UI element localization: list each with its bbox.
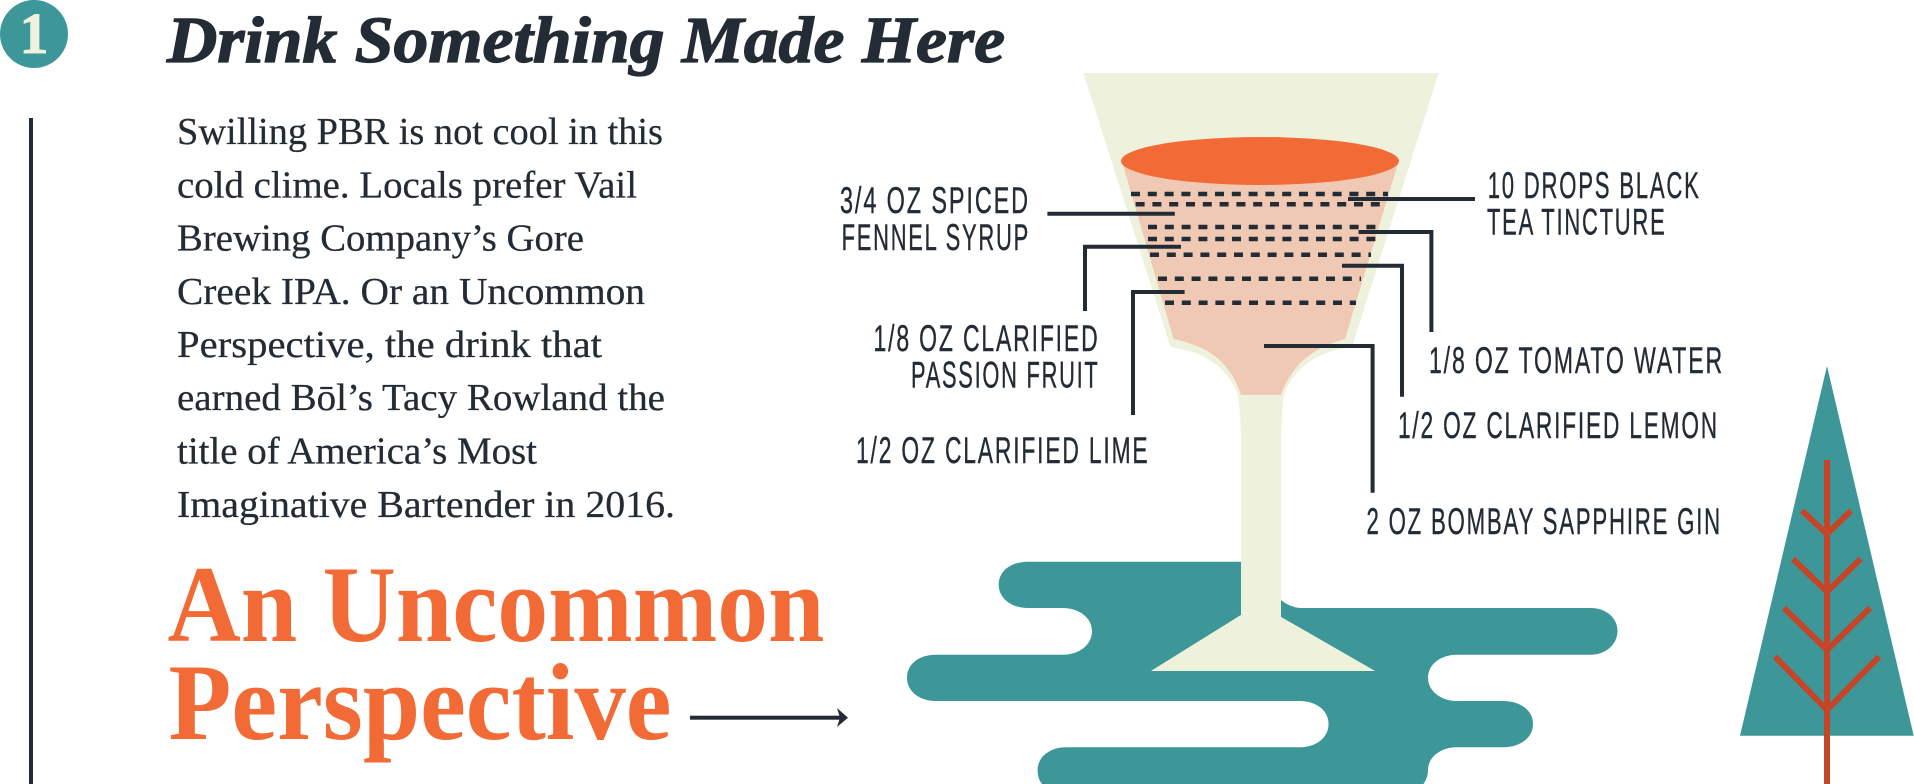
label: black tea tincture: TEA TINCTURE <box>1487 201 1666 243</box>
body text: title of America’s Most <box>177 430 537 472</box>
drink name heading: An Uncommon <box>168 544 824 665</box>
body text: Perspective, the drink that <box>177 324 602 366</box>
label: lemon: 1/2 OZ CLARIFIED LEMON <box>1398 404 1719 446</box>
body text: Brewing Company’s Gore <box>177 218 584 260</box>
drink name heading <box>168 544 824 763</box>
label: passion fruit: PASSION FRUIT <box>911 354 1100 396</box>
tree trunk and branches <box>1775 460 1879 784</box>
body text: earned Bōl’s Tacy Rowland the <box>177 377 665 419</box>
label: fennel syrup <box>840 179 1030 258</box>
badge: number 1: 1 <box>20 1 48 66</box>
label: fennel syrup: FENNEL SYRUP <box>842 216 1030 258</box>
body text <box>177 111 675 526</box>
body text: Creek IPA. Or an Uncommon <box>177 271 645 313</box>
label: black tea tincture <box>1487 164 1701 243</box>
label: passion fruit <box>874 317 1100 396</box>
cocktail glass <box>1084 73 1439 671</box>
label: lime: 1/2 OZ CLARIFIED LIME <box>856 429 1150 471</box>
drink name heading: Perspective <box>168 642 672 763</box>
glass body <box>1084 73 1439 671</box>
liquid surface <box>1121 137 1399 185</box>
label: fennel syrup: 3/4 OZ SPICED <box>840 179 1030 221</box>
liquid <box>1122 160 1399 395</box>
puddle <box>907 562 1618 784</box>
body text: Imaginative Bartender in 2016. <box>177 484 675 526</box>
leader lines <box>1047 199 1475 493</box>
body text: cold clime. Locals prefer Vail <box>177 164 637 206</box>
badge: number 1 <box>0 0 68 68</box>
tree <box>1740 366 1914 784</box>
title: Drink Something Made Here <box>166 4 1005 77</box>
ingredient layer dashes <box>1131 194 1388 303</box>
arrow <box>690 708 848 727</box>
label: tomato water: 1/8 OZ TOMATO WATER <box>1429 339 1724 381</box>
vertical rule <box>29 118 33 784</box>
body text: Swilling PBR is not cool in this <box>177 111 663 153</box>
foot <box>1151 615 1375 671</box>
label: black tea tincture: 10 DROPS BLACK <box>1488 164 1701 206</box>
label: passion fruit: 1/8 OZ CLARIFIED <box>874 317 1100 359</box>
